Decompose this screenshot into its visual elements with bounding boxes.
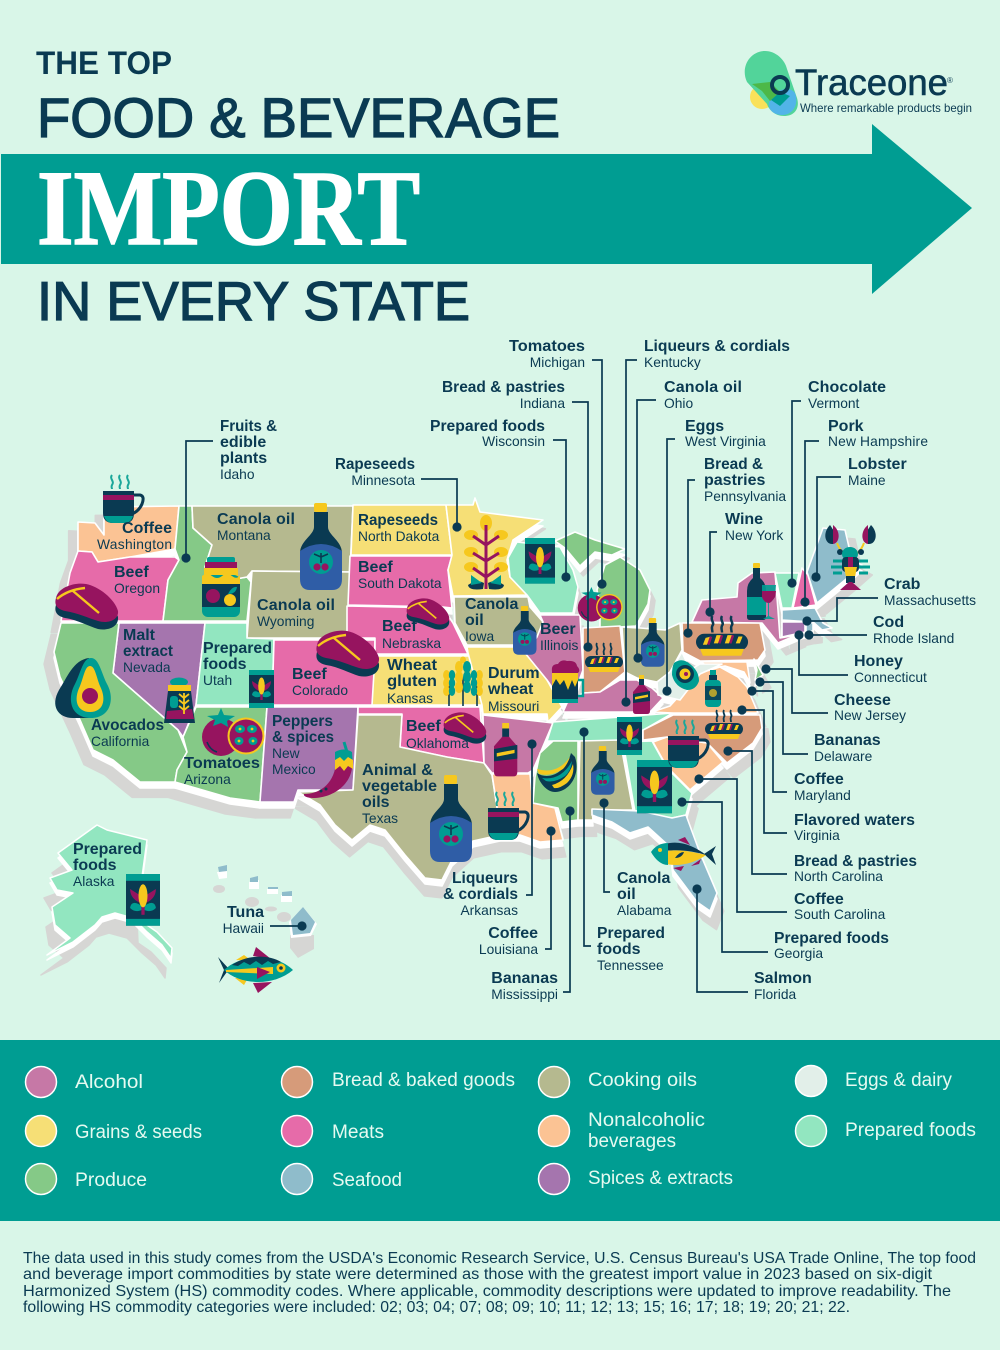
label: Michigan [509,338,585,370]
icon: steak Nebraska [407,598,449,630]
state: Kentucky [563,680,663,712]
label: Rhode Island: Cod [873,614,904,631]
icon: canned food Alaska [126,874,160,926]
label: Kansas [387,657,438,706]
label: Minnesota: Minnesota [351,473,415,488]
state: New Jersey [754,659,763,680]
icon: coffee Louisiana [488,792,528,840]
label: Arizona [184,755,260,787]
state: Wyoming [247,571,350,638]
icon: bread North Carolina [705,710,743,739]
map white edge [54,504,862,917]
label: Idaho: edible [220,434,266,451]
label: West Virginia: West Virginia [685,434,766,449]
state: Utah [196,623,274,705]
label: Missouri: Missouri [488,699,539,714]
label: Nebraska: Nebraska [382,636,441,651]
state: South Carolina [653,737,723,790]
state: Vermont [775,573,799,608]
icon: steak Oklahoma [444,712,486,744]
label: Vermont [808,379,886,411]
label: Alaska: Prepared [73,841,142,858]
icon: bread Indiana [585,643,623,672]
state: West Virginia [657,652,722,700]
label: Mississippi: Bananas [491,970,558,987]
label: Utah: Prepared [203,640,272,657]
label: Mississippi: Mississippi [491,987,558,1002]
label: Vermont: Chocolate [808,379,886,396]
label: Oregon [114,564,160,596]
methodology text: and beverage import commodities by state were determined as those with the greatest import value in 2023 based on six-digit [23,1266,933,1283]
state: Connecticut [782,622,805,637]
label: Alaska: Alaska [73,874,115,889]
label: Washington: Washington [97,537,172,552]
label: Connecticut [854,653,927,685]
label: Tennessee: foods [597,941,641,958]
state: Montana [192,506,353,580]
label: California: Avocados [91,717,164,734]
label: Utah: Utah [203,673,232,688]
state: Virginia [652,667,758,713]
label: Hawaii: Tuna [227,904,264,921]
label: New Hampshire [828,418,928,449]
label: Kansas: gluten [387,673,437,690]
state: North Carolina [643,715,762,763]
label: Illinois [540,621,578,653]
label: South Carolina [794,891,886,922]
label: South Carolina: South Carolina [794,907,886,922]
logo: Traceone: Traceone [795,62,948,103]
label: Massachusetts: Crab [884,576,921,593]
legend item: Alcohol [26,1066,143,1098]
legend item: Nonalcoholic beverages: beverages [588,1131,676,1152]
label: Alaska [73,841,142,889]
icon: chili New Mexico [304,742,353,798]
icon: coffee North Carolina [668,720,708,768]
label: Idaho: plants [220,450,267,467]
label: South Dakota [358,559,442,591]
label: Delaware: Delaware [814,749,873,764]
legend item: Bread and baked goods: Bread & baked goods [332,1070,515,1091]
legend item: Grains and seeds: Grains & seeds [75,1122,202,1143]
label: Oklahoma [406,718,469,751]
label: Idaho [220,418,277,482]
label: North Carolina [794,853,917,884]
label: Montana: Montana [217,528,271,543]
label: Connecticut: Honey [854,653,903,670]
label: New Hampshire: New Hampshire [828,434,928,449]
label: Ohio [664,379,742,411]
label: Georgia: Prepared foods [774,930,889,947]
title: in every state: IN EVERY STATE [37,270,470,332]
labels off map [220,338,976,1002]
label: Georgia [774,930,889,961]
label: Arkansas: Liqueurs [452,870,518,887]
label: Colorado: Colorado [292,683,348,698]
label: New Hampshire: Pork [828,418,864,435]
state: Louisiana [492,774,563,842]
title: the top: THE TOP [36,45,172,81]
label: Washington [97,520,172,552]
label: Texas: vegetable [362,778,437,795]
icon: flavored water Virginia [705,670,721,707]
label: Oklahoma: Oklahoma [406,736,469,751]
label: Nebraska [382,618,441,651]
state: Iowa [454,597,543,645]
label: Texas: Animal & [362,762,433,779]
label: Kentucky: Liqueurs & cordials [644,338,790,355]
label: Delaware [814,732,881,764]
state: Arizona [175,707,267,802]
label: Nevada: Nevada [123,660,171,675]
label: Wisconsin: Prepared foods [430,418,545,435]
methodology text: following HS commodity categories were included: 02; 03; 04; 07; 08; 09; 10; 11; 12; 13; 15; 16; 17; 18; 19; 20; 21; 22. [23,1299,850,1316]
label: Florida [754,970,812,1002]
icon: steak Colorado [316,631,379,676]
state: Massachusetts [782,608,832,630]
icon: jar Idaho [202,557,240,617]
label: West Virginia: Eggs [685,418,724,435]
icon: canned food Utah [249,670,274,708]
logo: Traceone [745,51,972,116]
icon: syrup bottle Texas [430,775,472,862]
methodology text: The data used in this study comes from the USDA's Economic Research Service, U.S. Census Bureau's USA Trade Online, The top food [23,1250,976,1267]
label: Iowa: Canola [465,596,518,613]
label: Missouri: wheat [487,681,534,698]
state: Mississippi [533,741,578,822]
label: Missouri [487,665,540,714]
label: Colorado [292,666,348,698]
state: Nebraska [347,606,468,654]
label: Oregon: Beef [114,564,149,581]
icon: malt bag Nevada [164,678,195,723]
label: Florida: Florida [754,987,796,1002]
state: Pennsylvania [682,623,765,661]
label: Kentucky [644,338,790,370]
legend item: Meats: Meats [332,1122,384,1143]
label: Florida: Salmon [754,970,812,987]
icon: canned food Tennessee [617,717,642,755]
icon: salmon Florida [651,837,716,871]
icon: coffee Washington [103,475,143,523]
label: Virginia [794,812,915,843]
legend item: Seafood [282,1164,402,1194]
state: Texas [298,715,500,880]
label: New York: New York [725,528,783,543]
icon: avocado California [55,658,111,718]
label: North Dakota [358,512,440,544]
leader lines [181,360,878,992]
label: South Dakota: Beef [358,559,393,576]
label: Maryland [794,771,851,803]
icon: rapeseed Minnesota [464,515,508,590]
label: South Dakota: South Dakota [358,576,442,591]
label: Rhode Island [873,614,954,646]
icon: wine New York [747,563,776,620]
label: California [91,717,164,749]
legend item: Grains and seeds [26,1116,202,1146]
label: Vermont: Vermont [808,396,860,411]
state: Minnesota [446,498,543,596]
panel: legend [0,1040,1000,1221]
label: New Mexico [272,713,334,777]
label: Utah: foods [203,656,247,673]
icon: syrup bottle Alabama [591,746,615,795]
label: Idaho: Fruits & [220,418,277,435]
label: Oregon: Oregon [114,581,160,596]
state: Indiana [583,626,625,693]
icon: liquor Arkansas [494,723,517,776]
state: New Hampshire [793,568,816,608]
state: Illinois [525,615,583,703]
label: Louisiana: Louisiana [479,942,538,957]
label: Indiana: Indiana [520,396,565,411]
label: New Mexico: Peppers [272,713,333,730]
state: New York [692,572,797,643]
icon: syrup bottle Ohio [641,618,665,667]
label: Michigan: Tomatoes [509,338,585,355]
methodology text [23,1250,976,1316]
legend item: Meats [282,1116,384,1146]
label: Indiana: Bread & pastries [442,379,565,396]
label: Alabama: oil [617,886,636,903]
label: Maine: Lobster [848,456,907,473]
label: Georgia: Georgia [774,946,823,961]
state: Idaho [163,506,251,621]
label: Illinois: Illinois [540,638,578,653]
label: New Jersey: New Jersey [834,708,906,723]
icon: canned food Georgia [637,760,672,813]
legend item: Eggs and dairy [796,1066,952,1096]
state: Ohio [622,623,682,682]
state: Tennessee [547,713,673,741]
label: Maine: Maine [848,473,886,488]
label: Louisiana: Coffee [488,925,538,942]
label: North Dakota: Rapeseeds [358,512,438,529]
state: Michigan [555,532,625,566]
label: Kansas: Kansas [387,691,433,706]
label: Indiana [442,379,565,411]
icon: egg West Virginia [672,660,699,690]
label: Alabama: Alabama [617,903,672,918]
title: food and beverage: FOOD & BEVERAGE [37,86,560,149]
label: Utah [203,640,272,688]
title: import: IMPORT [37,150,420,268]
label: Connecticut: Connecticut [854,670,927,685]
label: Wyoming [257,597,335,629]
label: Arkansas: Arkansas [460,903,518,918]
icon: syrup bottle Montana [300,503,342,590]
label: Nevada [123,627,174,675]
label: Colorado: Beef [292,666,327,683]
label: Arkansas [443,870,518,918]
label: New York: Wine [725,511,763,528]
icon: liquor Kentucky [633,675,650,714]
label: West Virginia [685,418,766,449]
state: New Mexico [260,707,358,802]
label: Illinois: Beer [540,621,576,638]
label: Delaware: Bananas [814,732,881,749]
state: Georgia [623,741,692,818]
state: Wisconsin [508,542,578,613]
map: contiguous states [54,498,862,911]
legend item: Produce: Produce [75,1170,147,1191]
label: Idaho: Idaho [220,467,255,482]
label: Alaska: foods [73,857,117,874]
label: Kansas: Wheat [387,657,438,674]
label: Iowa: Iowa [465,629,494,644]
label: Wisconsin [430,418,545,449]
label: Texas: Texas [362,811,398,826]
label: Maine [848,456,907,488]
legend item: Spices and extracts [538,1164,733,1194]
label: Wisconsin: Wisconsin [482,434,545,449]
icon: steak Oregon [55,584,118,630]
state: Maine [807,528,862,603]
icon: lobster Maine [825,525,876,590]
label: New Mexico: New [272,746,300,761]
label: Pennsylvania: Bread & [704,456,763,473]
state: Washington [78,506,179,562]
label: Tennessee: Tennessee [597,958,664,973]
label: Michigan: Michigan [530,355,585,370]
label: Ohio: Ohio [664,396,693,411]
state: Oregon [61,551,179,621]
legend item: Cooking oils: Cooking oils [588,1070,697,1091]
state: Missouri [467,647,562,722]
label: North Carolina: North Carolina [794,869,883,884]
label: Montana: Canola oil [217,511,295,528]
label: Pennsylvania [704,456,786,504]
label: Wyoming: Wyoming [257,614,314,629]
label: Virginia: Flavored waters [794,812,915,829]
label: New Jersey [834,692,906,723]
label: New York [725,511,783,543]
label: Virginia: Virginia [794,828,840,843]
icon: bananas Mississippi [537,753,577,792]
label: Mississippi [491,970,558,1002]
legend item: Spices and extracts: Spices & extracts [588,1168,733,1189]
label: Arkansas: & cordials [443,886,518,903]
map: Alaska [47,825,172,958]
label: Alabama: Canola [617,870,670,887]
label: Montana [217,511,295,543]
label: New Mexico: Mexico [272,762,316,777]
map shadow [44,506,872,930]
label: Texas: oils [362,794,390,811]
logo: Traceone: Where remarkable products begin [800,102,972,115]
label: Tennessee: Prepared [597,925,665,942]
banner arrow [1,124,972,294]
label: Maryland: Coffee [794,771,844,788]
map: Hawaii islands [213,865,317,958]
icon: tomato Arizona [202,708,264,756]
state: California [54,623,187,782]
icon: canned food Wisconsin [525,538,555,584]
legend item: Produce [26,1164,147,1194]
label: North Carolina: Bread & pastries [794,853,917,870]
label: Iowa: oil [465,612,484,629]
label: Massachusetts: Massachusetts [884,593,976,608]
icon: syrup bottle Iowa [513,606,537,655]
legend item: Prepared foods [796,1116,976,1146]
icon: bread Pennsylvania [696,616,748,656]
state: Colorado [272,640,375,705]
legend item: Nonalcoholic beverages [538,1110,705,1152]
label: New Mexico: & spices [272,729,334,746]
label: Massachusetts [884,576,976,608]
label: Nebraska: Beef [382,618,417,635]
label: Pennsylvania: Pennsylvania [704,489,786,504]
label: Missouri: Durum [488,665,540,682]
label: Arizona: Arizona [184,772,231,787]
logo: Traceone: ® [947,76,953,85]
state: Nevada [113,623,205,737]
legend item: Bread and baked goods [282,1066,515,1098]
state: Rhode Island [806,622,813,632]
label: Hawaii [223,904,264,936]
legend item: Eggs and dairy: Eggs & dairy [845,1070,952,1091]
label: Minnesota [335,456,415,488]
label: California: California [91,734,150,749]
label: Louisiana [479,925,538,957]
label: Tennessee [597,925,665,973]
label: North Dakota: North Dakota [358,529,440,544]
label: Nevada: extract [123,643,174,660]
label: Arizona: Tomatoes [184,755,260,772]
state: South Dakota [348,556,452,608]
methodology text: Harmonized System (HS) commodity codes. Where applicable, commodity descriptions were updated to improve readability. The [23,1283,951,1300]
state: Kansas [372,656,482,705]
icon: wheat Kansas [443,656,483,706]
Alaska white edge [47,830,172,963]
Alaska shadow [41,845,166,978]
label: Texas [362,762,437,826]
label: Iowa [465,596,518,644]
label: Pennsylvania: pastries [704,472,765,489]
legend item: Seafood: Seafood [332,1170,402,1191]
label: Minnesota: Rapeseeds [335,456,415,473]
state: North Dakota [351,505,452,555]
icon: tuna Hawaii [218,947,293,993]
icon: tomato Michigan [578,587,623,622]
label: Kentucky: Kentucky [644,355,701,370]
label: Rhode Island: Rhode Island [873,631,954,646]
label: Alabama [617,870,672,918]
legend item: Cooking oils [538,1066,697,1098]
legend item: Nonalcoholic beverages: Nonalcoholic [588,1110,705,1131]
label: South Carolina: Coffee [794,891,844,908]
legend item: Alcohol: Alcohol [75,1072,143,1093]
label: Maryland: Maryland [794,788,851,803]
label: Hawaii: Hawaii [223,921,264,936]
icon: beer Illinois [552,660,583,703]
state: Arkansas [483,715,553,773]
labels on map [73,511,578,936]
label: Nevada: Malt [123,627,156,644]
label: Wyoming: Canola oil [257,597,335,614]
label: Washington: Coffee [122,520,172,537]
label: New Jersey: Cheese [834,692,891,709]
state: Florida [592,809,717,911]
label: Ohio: Canola oil [664,379,742,396]
state: Oklahoma [358,707,484,763]
legend item: Prepared foods: Prepared foods [845,1120,976,1141]
state: Maryland [700,662,750,683]
label: Oklahoma: Beef [406,718,441,735]
state: Alabama [578,740,633,820]
